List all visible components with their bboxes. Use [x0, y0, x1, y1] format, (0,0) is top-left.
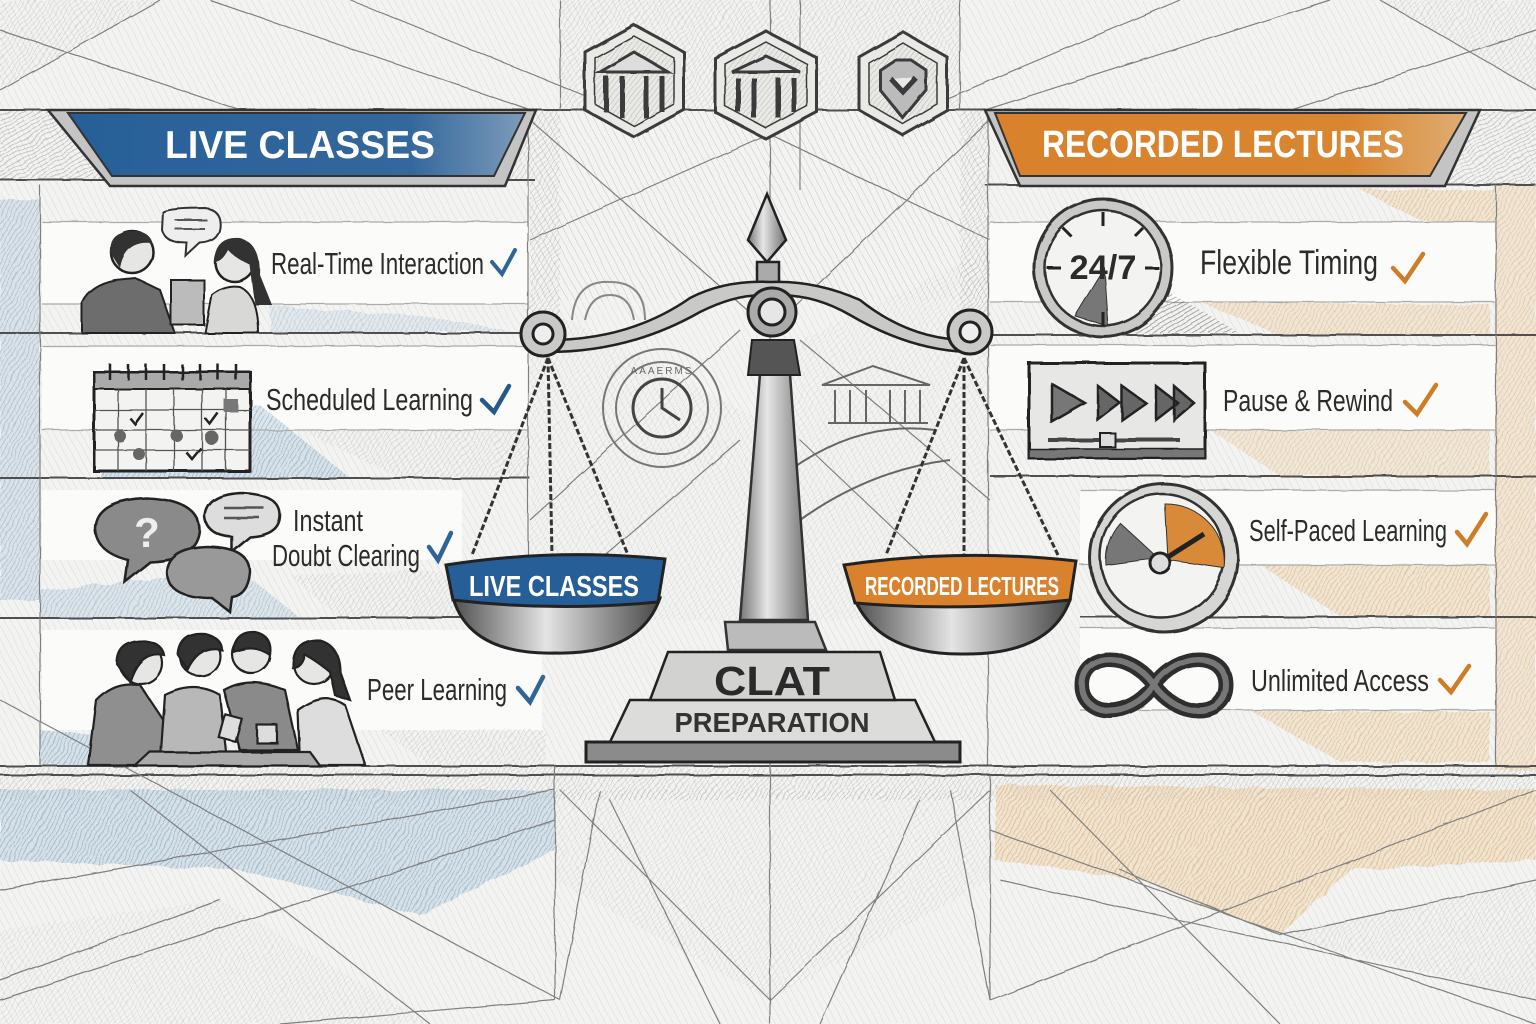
text: question mark: ?: [134, 509, 160, 556]
emblem: clock seal: [603, 349, 721, 467]
base: CLAT preparation: PREPARATION: [674, 707, 870, 738]
heading banner: live classes: [48, 110, 536, 186]
icon: speedometer: [1090, 484, 1238, 632]
icon: shield 3: [859, 32, 947, 135]
panel: live classes: [48, 110, 543, 766]
text: scheduled learning: Scheduled Learning: [266, 382, 473, 417]
column: [725, 340, 826, 650]
check: [492, 250, 515, 274]
check: [429, 533, 451, 560]
finial: [748, 194, 786, 290]
icon: peer group: [88, 632, 365, 766]
emblem: dome sketch: [572, 282, 645, 320]
text: real-time interaction: Real-Time Interaction: [271, 246, 484, 281]
text: instant doubt clearing: [272, 503, 420, 573]
emblem: clock seal: AAAERMS: [631, 366, 693, 377]
text: flexible timing: Flexible Timing: [1200, 244, 1378, 282]
left pan: [446, 555, 665, 653]
base: CLAT preparation: CLAT: [714, 658, 830, 704]
icon: shield 1: [585, 25, 684, 137]
text: instant doubt clearing: Instant: [293, 503, 363, 538]
icon: speech bubbles: [95, 493, 280, 612]
panel: recorded lectures: [985, 110, 1486, 711]
icon: calendar: [94, 364, 250, 471]
orange shading lower right: [995, 185, 1536, 935]
check: [1393, 254, 1423, 281]
right pan: [844, 555, 1076, 654]
icon: video player: [1029, 363, 1205, 458]
heading banner: live classes: LIVE CLASSES: [165, 124, 435, 167]
check: [1405, 385, 1436, 414]
scale: [446, 194, 1076, 762]
heading banner: recorded lectures: [985, 110, 1480, 186]
check: [1457, 514, 1486, 544]
icon: two people talking: [82, 208, 272, 333]
icons: three law school shields: [585, 25, 947, 139]
icon: 24/7 clock: [1034, 199, 1240, 337]
emblem: courthouse sketch: [790, 366, 950, 520]
right pan: RECORDED LECTURES: [865, 571, 1059, 601]
check: [482, 386, 509, 412]
chains: [472, 358, 1058, 555]
text: unlimited access: Unlimited Access: [1251, 663, 1429, 698]
icon: infinity: [1082, 659, 1226, 711]
blue shading lower left: [0, 200, 555, 915]
heading banner: recorded lectures: RECORDED LECTURES: [1042, 124, 1404, 166]
base: CLAT preparation: [586, 652, 960, 762]
check: [518, 677, 543, 702]
panel row bands: [42, 222, 1495, 730]
text: instant doubt clearing: Doubt Clearing: [272, 538, 420, 573]
icon: shield 2: [715, 31, 817, 139]
text: peer learning: Peer Learning: [367, 672, 507, 707]
row corner shading: [40, 302, 1490, 765]
beam: [521, 282, 992, 356]
check: [1440, 666, 1469, 692]
text: self-paced learning: Self-Paced Learning: [1249, 513, 1447, 548]
left pan: LIVE CLASSES: [469, 571, 639, 603]
text: pause and rewind: Pause & Rewind: [1223, 383, 1393, 418]
text: 24/7: 24/7: [1070, 249, 1136, 287]
